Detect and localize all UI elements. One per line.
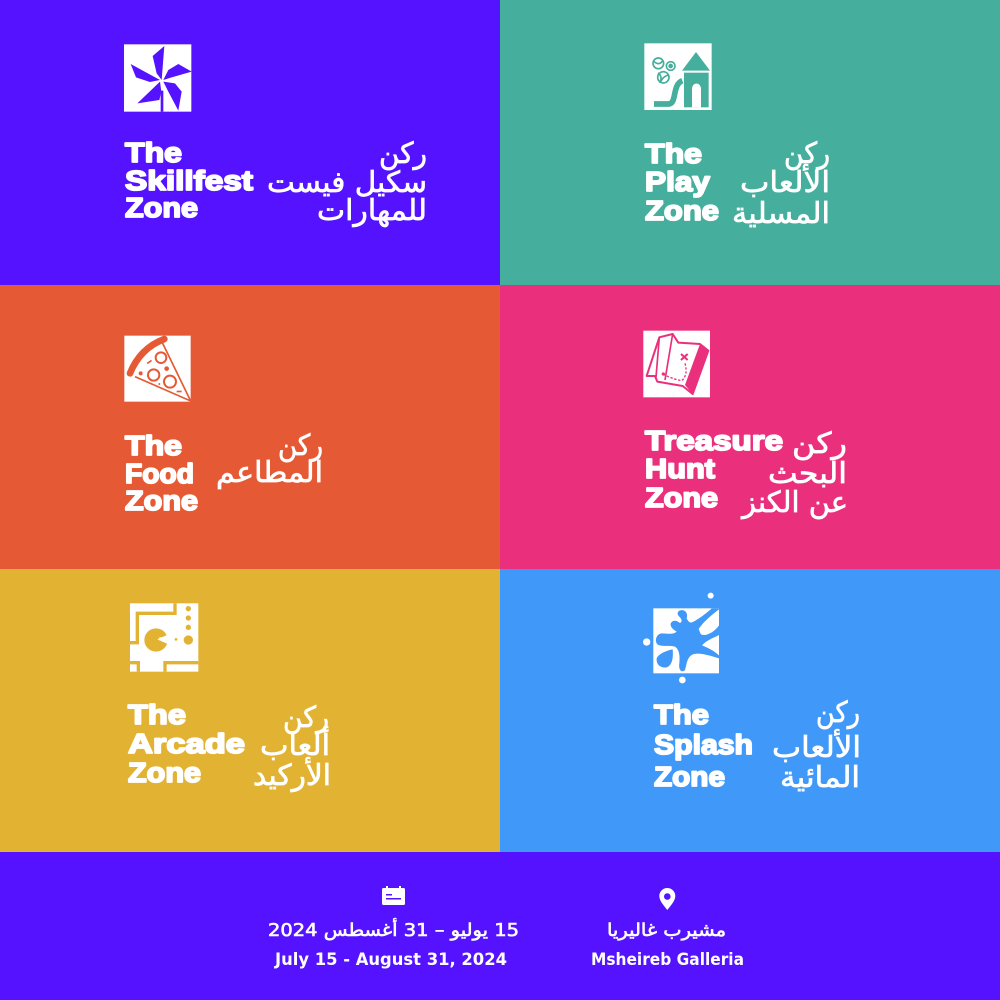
panel: Treasure Hunt Zone [500, 285, 1000, 569]
panel: event footer [0, 852, 1000, 1000]
heading: The Food Zone: Food [125, 458, 194, 489]
heading: The Splash Zone: The [654, 699, 709, 730]
panel: The Play Zone [500, 0, 1000, 285]
arabic heading: Arcade Zone: الأركيد [253, 756, 331, 792]
arabic heading: Treasure Hunt Zone: ركن [792, 426, 847, 460]
icon: calendar [382, 886, 405, 905]
heading: The Splash Zone: Zone [654, 761, 725, 792]
text: venue: مشيرب غاليريا [607, 920, 726, 941]
heading: The Skillfest Zone [125, 137, 253, 223]
arabic heading: Splash Zone: المائية [780, 760, 860, 794]
arabic heading: Treasure Hunt Zone [740, 426, 848, 519]
arabic heading: Food Zone [216, 428, 323, 490]
arabic heading: Arcade Zone: ركن [283, 700, 329, 734]
heading: The Arcade Zone [128, 699, 245, 788]
heading: Treasure Hunt Zone [645, 425, 783, 513]
icon: pinwheel [124, 44, 192, 112]
icon: arcade maze with pac-man [130, 603, 198, 672]
icon: slide, castle and balls [644, 43, 712, 110]
heading: The Play Zone [645, 138, 719, 226]
arabic heading: Skillfest Zone: للمهارات [317, 193, 427, 227]
heading: The Skillfest Zone: Zone [125, 192, 198, 223]
arabic heading: Play Zone: الألعاب [740, 163, 830, 199]
icon: treasure map [643, 331, 710, 397]
arabic heading: Splash Zone [772, 695, 861, 794]
heading: Treasure Hunt Zone: Hunt [645, 453, 715, 484]
heading: The Skillfest Zone: The [125, 137, 182, 168]
heading: Treasure Hunt Zone: Zone [645, 482, 718, 513]
heading: The Food Zone: The [125, 430, 182, 461]
heading: The Play Zone: Play [645, 166, 710, 197]
text: venue: Msheireb Galleria [591, 950, 744, 970]
arabic heading: Food Zone: ركن [278, 428, 323, 462]
panel: The Skillfest Zone [0, 0, 500, 285]
text: dates [268, 918, 519, 970]
arabic heading: Treasure Hunt Zone: عن الكنز [740, 485, 848, 519]
arabic heading: Treasure Hunt Zone: البحث [768, 456, 847, 490]
arabic heading: Splash Zone: الألعاب [772, 728, 861, 764]
text: venue [591, 920, 744, 970]
heading: The Play Zone: Zone [645, 195, 719, 226]
arabic heading: Food Zone: المطاعم [216, 455, 323, 490]
arabic heading: Splash Zone: ركن [816, 695, 860, 729]
heading: The Food Zone: Zone [125, 485, 198, 516]
arabic heading: Arcade Zone: ألعاب [260, 725, 330, 762]
heading: The Arcade Zone: The [128, 699, 186, 730]
arabic heading: Skillfest Zone: سكيل فيست [267, 165, 427, 199]
panel: The Arcade Zone [0, 569, 500, 852]
panel: The Food Zone [0, 285, 500, 569]
heading: The Arcade Zone: Zone [128, 757, 201, 788]
arabic heading: Arcade Zone [253, 700, 331, 792]
icon: water splash [643, 593, 719, 683]
text: dates: 15 يوليو – 31 أغسطس 2024 [268, 918, 519, 941]
heading: The Splash Zone [654, 699, 753, 792]
arabic heading: Skillfest Zone [267, 136, 427, 227]
panel: The Splash Zone [500, 569, 1000, 852]
text: dates: July 15 - August 31, 2024 [274, 950, 507, 970]
heading: The Food Zone [125, 430, 198, 516]
heading: The Play Zone: The [645, 138, 702, 169]
heading: Treasure Hunt Zone: Treasure [645, 425, 783, 456]
arabic heading: Play Zone: ركن [784, 136, 830, 170]
arabic heading: Play Zone [732, 136, 830, 230]
heading: The Skillfest Zone: Skillfest [125, 165, 253, 196]
icon: pizza slice [124, 336, 191, 402]
arabic heading: Play Zone: المسلية [732, 196, 830, 230]
heading: The Splash Zone: Splash [654, 729, 753, 760]
icon: location pin [659, 888, 675, 910]
heading: The Arcade Zone: Arcade [128, 728, 245, 759]
arabic heading: Skillfest Zone: ركن [379, 136, 427, 170]
